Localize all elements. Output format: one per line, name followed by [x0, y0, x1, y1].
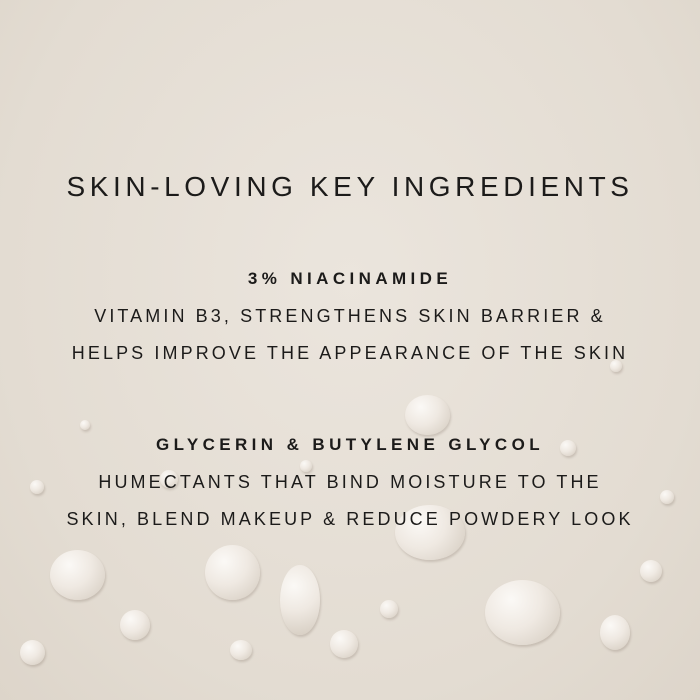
heading: glycerin: GLYCERIN & BUTYLENE GLYCOL: [156, 435, 544, 454]
heading: niacinamide: 3% NIACINAMIDE: [248, 269, 452, 288]
text: niacinamide description: [72, 306, 628, 363]
block: glycerin: [66, 435, 634, 529]
text: glycerin description: [66, 472, 634, 529]
title: SKIN-LOVING KEY INGREDIENTS: [66, 171, 634, 202]
text: glycerin description: HUMECTANTS THAT BIND MOISTURE TO THE: [98, 472, 602, 492]
block: niacinamide: [72, 269, 628, 363]
text: niacinamide description: VITAMIN B3, STRENGTHENS SKIN BARRIER &: [94, 306, 606, 326]
text: glycerin description: SKIN, BLEND MAKEUP & REDUCE POWDERY LOOK: [66, 509, 634, 529]
text: niacinamide description: HELPS IMPROVE THE APPEARANCE OF THE SKIN: [72, 343, 628, 363]
